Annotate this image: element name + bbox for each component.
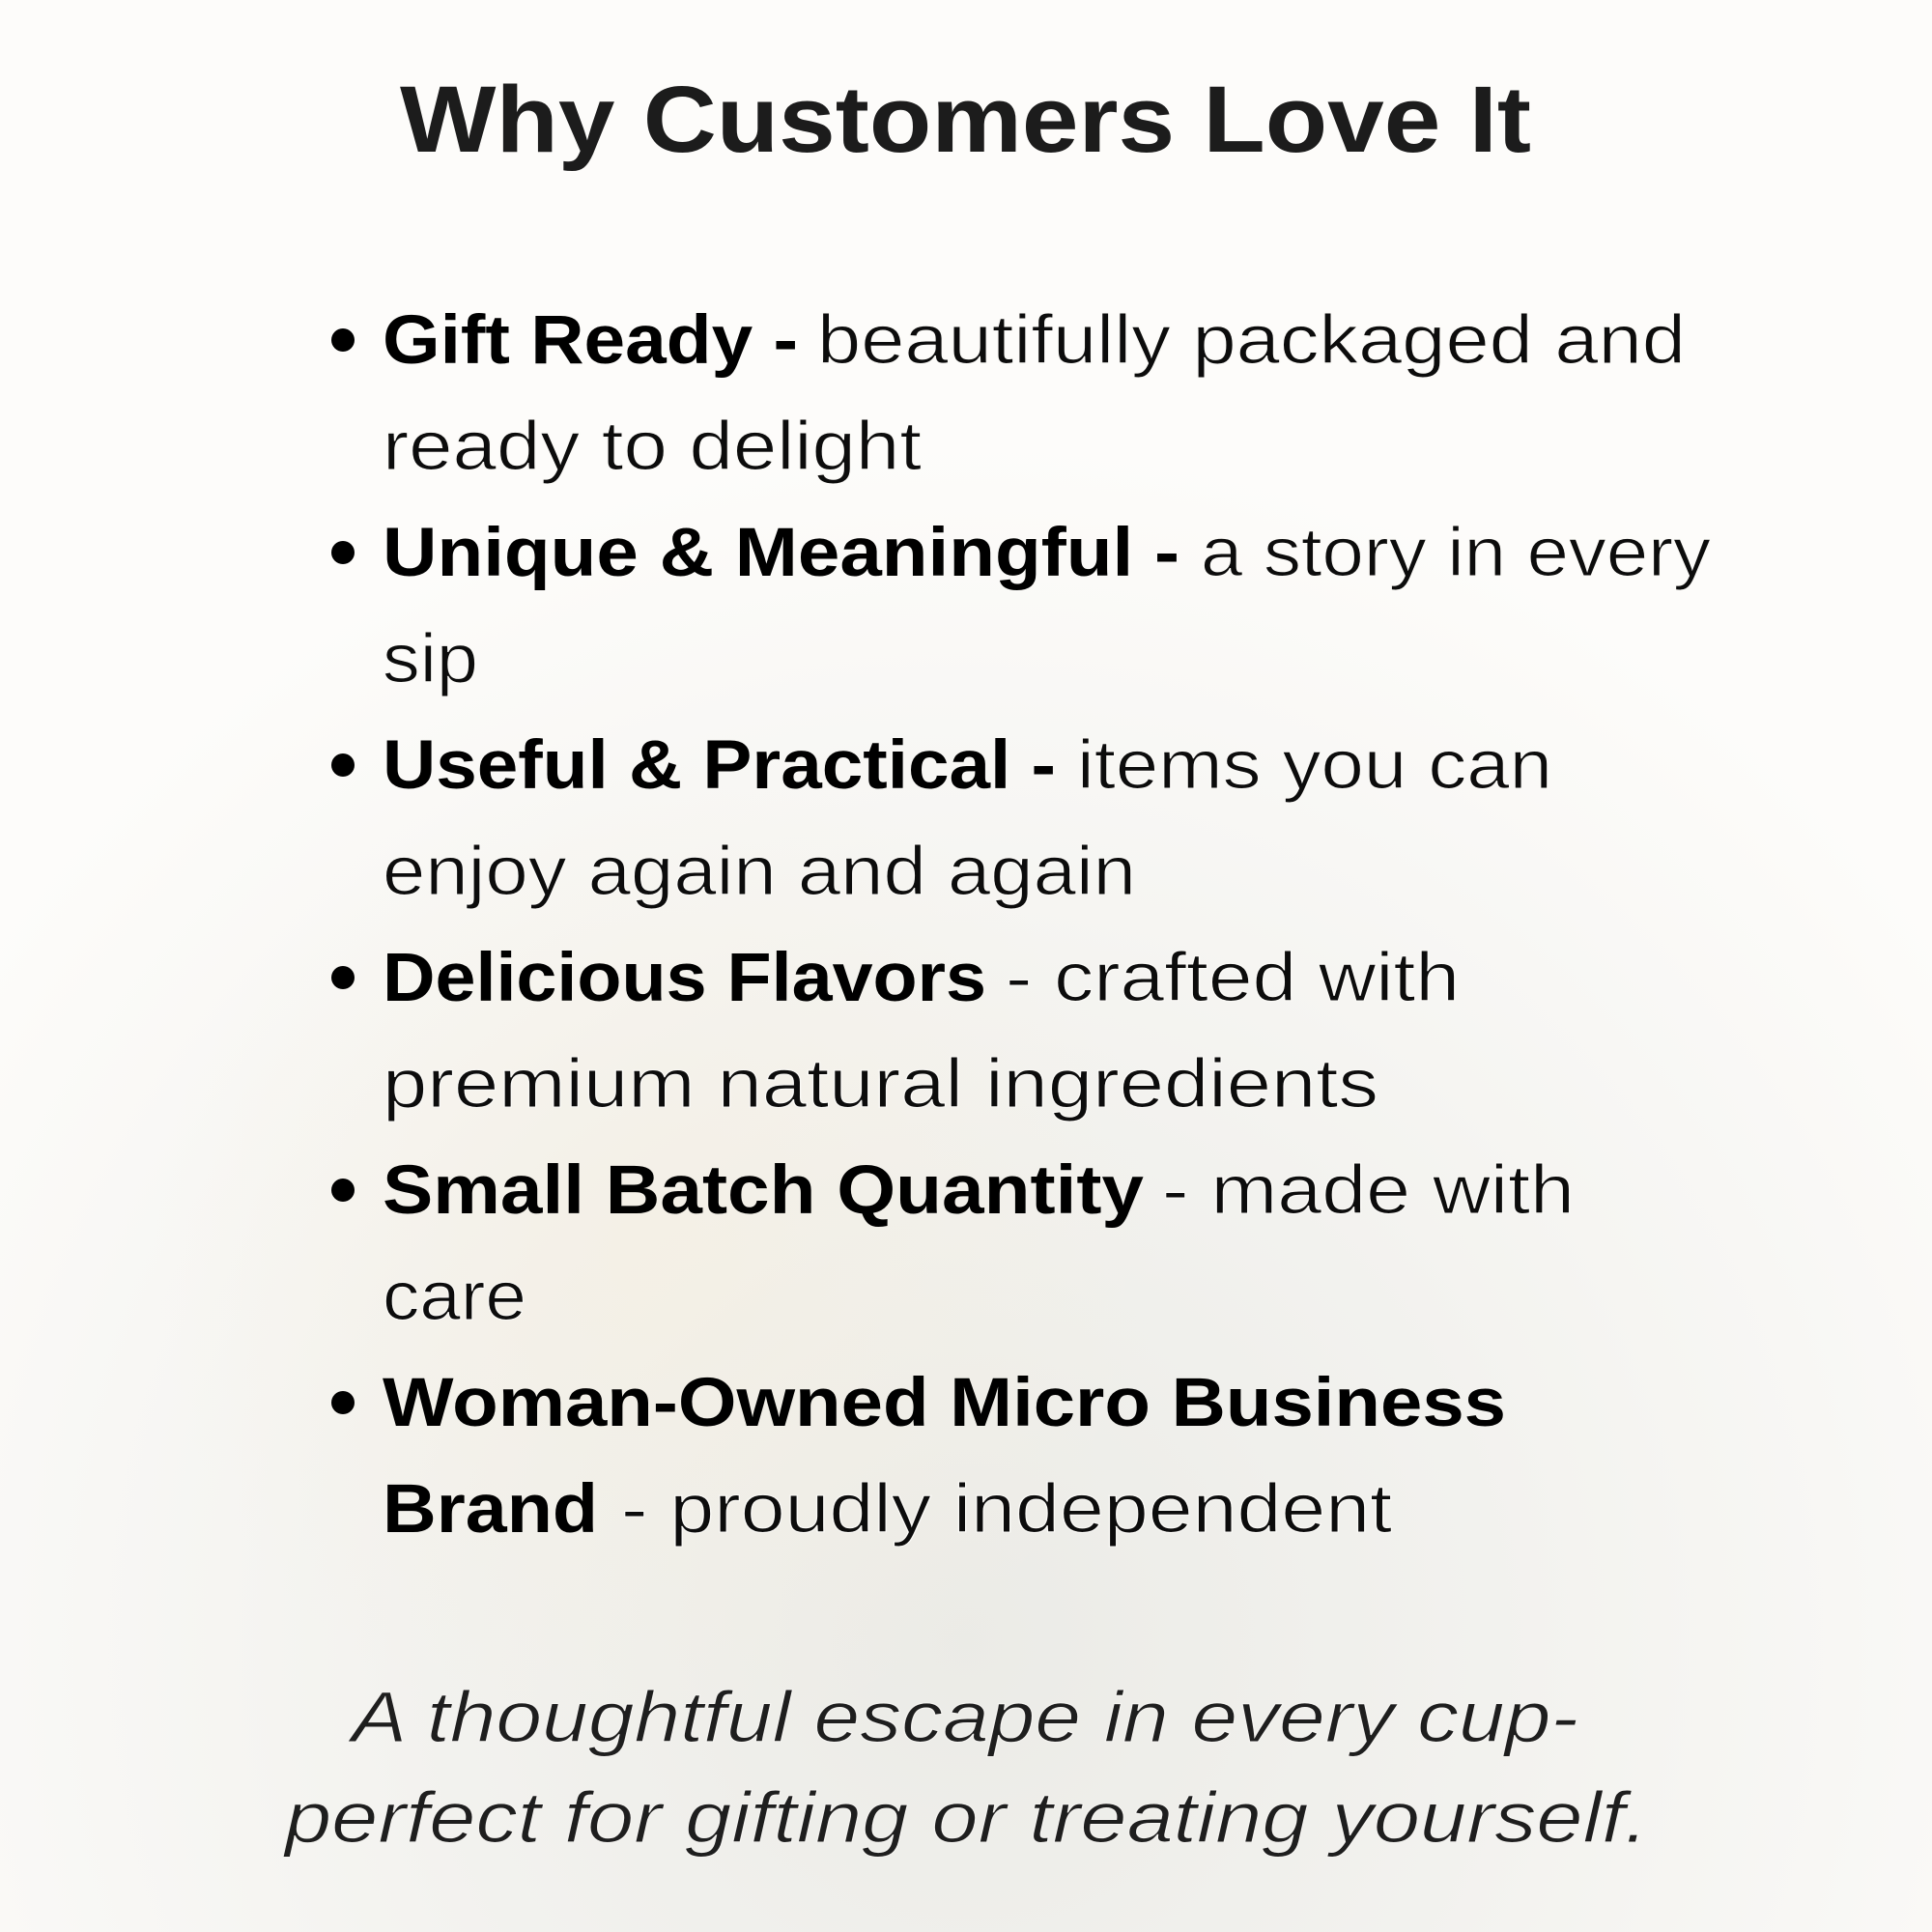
list item: unique and meaningful <box>331 515 1712 697</box>
list item: delicious flavors: Delicious Flavors <box>383 940 986 1016</box>
closing tagline: perfect for gifting or treating yourself. <box>283 1777 1648 1858</box>
list item: gift ready: beautifully packaged and <box>817 302 1686 379</box>
list item: gift ready: Gift Ready - <box>383 302 798 379</box>
list item: useful and practical: enjoy again and again <box>383 834 1136 910</box>
list item: unique and meaningful: a story in every <box>1201 515 1712 591</box>
list item: small batch quantity: care <box>383 1259 526 1335</box>
benefits list <box>331 302 1712 1548</box>
list item: woman-owned micro business brand: Woman-Owned Micro Business <box>383 1365 1506 1441</box>
list item: unique and meaningful: sip <box>383 621 478 697</box>
list item: delicious flavors <box>331 940 1460 1122</box>
list item: gift ready: ready to delight <box>383 409 922 485</box>
title: Why Customers Love It <box>400 67 1531 172</box>
list item: small batch quantity: Small Batch Quantity <box>383 1152 1145 1229</box>
list item: gift ready <box>331 302 1686 485</box>
list item: small batch quantity <box>331 1152 1575 1335</box>
list item: useful and practical <box>331 727 1552 910</box>
list item: useful and practical: Useful & Practical - <box>383 727 1056 804</box>
list item: delicious flavors: - crafted with <box>1006 940 1460 1016</box>
list item: useful and practical: items you can <box>1077 727 1552 804</box>
closing tagline: A thoughtful escape in every cup- <box>347 1677 1578 1757</box>
list item: woman-owned micro business brand: - proudly independent <box>621 1471 1392 1548</box>
list item: small batch quantity: - made with <box>1162 1152 1575 1229</box>
closing tagline <box>283 1677 1648 1858</box>
list item: woman-owned micro business brand <box>331 1365 1506 1548</box>
list item: delicious flavors: premium natural ingredients <box>383 1046 1378 1122</box>
list item: unique and meaningful: Unique & Meaningful - <box>383 515 1179 591</box>
list item: woman-owned micro business brand: Brand <box>383 1471 598 1548</box>
